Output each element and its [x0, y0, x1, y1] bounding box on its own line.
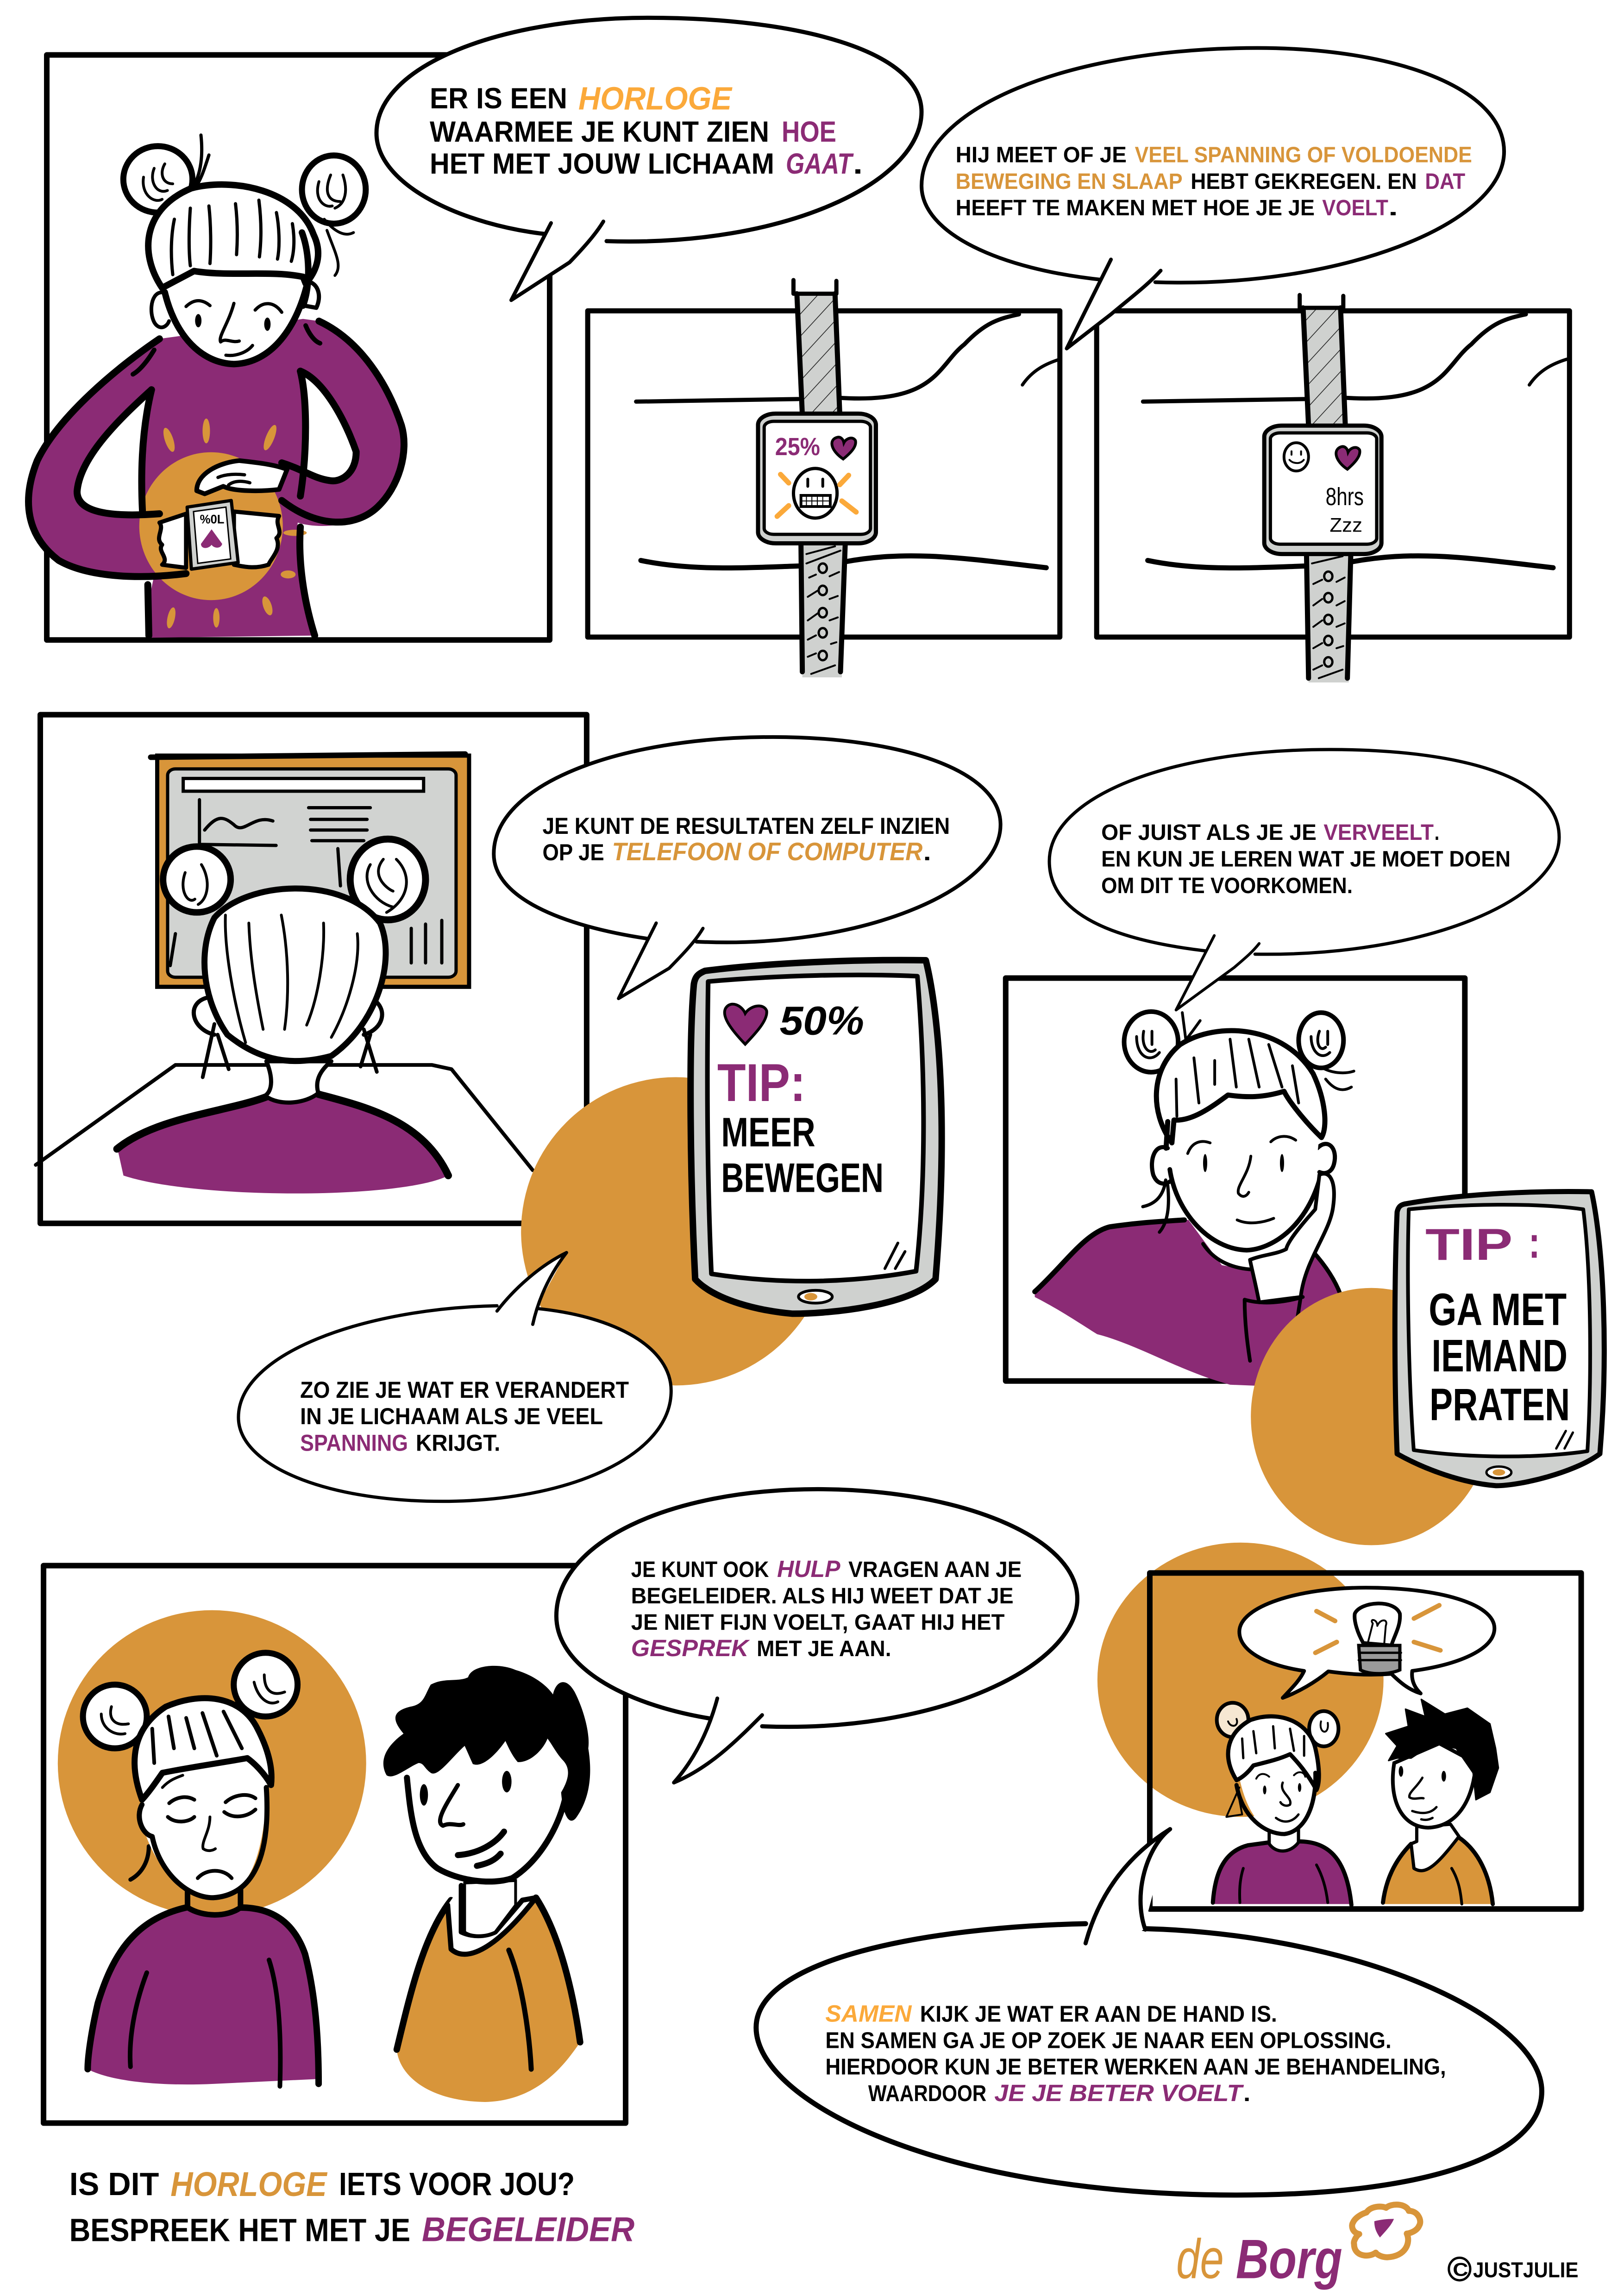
icon: phone with tip meer bewegen: BEWEGEN — [721, 1155, 884, 1201]
closing text: is dit horloge iets voor jou: IETS VOOR JOU? — [339, 2166, 575, 2202]
speech bubble: horloge: . — [853, 147, 863, 180]
speech bubble: samen: WAARDOOR — [868, 2081, 986, 2106]
panel frame — [47, 55, 550, 640]
icon: tablet with tip ga met iemand praten: IEMAND — [1432, 1330, 1568, 1381]
panel frame — [44, 1565, 626, 2123]
speech bubble: meet spanning: VOELT — [1322, 195, 1388, 220]
panel frame — [1097, 311, 1569, 637]
panel frame — [40, 715, 587, 1223]
speech bubble: meet spanning: . — [1388, 195, 1398, 220]
speech bubble: samen: . — [1243, 2081, 1250, 2106]
speech bubble: verandert in lichaam: IN JE LICHAAM ALS JE VEEL — [300, 1403, 603, 1429]
illustration: sad girl — [83, 1653, 319, 2086]
speech bubble: horloge — [376, 18, 922, 300]
speech bubble: resultaten inzien — [494, 737, 1001, 999]
panel: watch with sleep reading — [1097, 295, 1569, 682]
speech bubble: verandert in lichaam: KRIJGT. — [416, 1430, 500, 1456]
closing text: is dit horloge iets voor jou: HORLOGE — [170, 2165, 327, 2203]
speech bubble: samen: KIJK JE WAT ER AAN DE HAND IS. — [920, 2002, 1277, 2027]
speech bubble: hulp vragen: GESPREK — [631, 1635, 750, 1662]
icon: phone with tip meer bewegen — [690, 960, 942, 1314]
icon: tablet with tip ga met iemand praten — [1395, 1192, 1604, 1486]
speech bubble: verandert in lichaam: ZO ZIE JE WAT ER VERANDERT — [300, 1376, 629, 1403]
speech bubble: resultaten inzien: OP JE — [543, 839, 604, 865]
illustration: arm lines — [1143, 314, 1567, 568]
speech bubble: verveelt: VERVEELT — [1323, 820, 1434, 845]
icon: watch face with 25% and stressed smiley — [758, 413, 876, 544]
closing text: is dit horloge iets voor jou — [69, 2165, 634, 2248]
orange circle behind frame — [1097, 1543, 1384, 1817]
icon: tablet with tip ga met iemand praten: TIP — [1425, 1220, 1512, 1270]
speech bubble: hulp vragen: VRAGEN AAN JE — [848, 1557, 1022, 1582]
speech bubble: hulp vragen: BEGELEIDER. ALS HIJ WEET DAT JE — [631, 1583, 1014, 1608]
speech bubble: samen: SAMEN — [825, 2000, 912, 2027]
illustration: girl head — [123, 135, 366, 364]
icon: phone with tip meer bewegen: 50% — [780, 998, 864, 1044]
speech bubble: resultaten inzien: . — [923, 839, 931, 865]
icon: watch face with smiley heart and sleep: 8hrs — [1326, 483, 1364, 511]
speech bubble: horloge: HET MET JOUW LICHAAM — [430, 147, 774, 180]
orange circle behind phone — [521, 1077, 830, 1385]
panel frame — [1006, 978, 1465, 1381]
illustration: smiling boy — [1383, 1699, 1499, 1904]
thought bubble with light bulb — [1239, 1588, 1494, 1698]
speech bubble: horloge: WAARMEE JE KUNT ZIEN — [430, 115, 769, 148]
icon: phone with tip meer bewegen: TIP: — [717, 1053, 806, 1113]
speech bubble: horloge: ER IS EEN — [430, 82, 567, 115]
panel: watch with stress reading — [588, 280, 1060, 677]
icon: watch face with smiley heart and sleep — [1264, 425, 1381, 554]
illustration: girl with watch — [29, 319, 404, 638]
illustration: boy — [383, 1666, 590, 2102]
speech bubble: verveelt: OF JUIST ALS JE JE — [1101, 820, 1317, 845]
panel: girl at computer — [36, 715, 1001, 1501]
panel: thinking girl — [1006, 750, 1604, 1545]
illustration: monitor with charts — [150, 754, 469, 987]
speech bubble: horloge: GAAT — [786, 147, 854, 180]
illustration: watch strap — [1300, 295, 1351, 682]
speech bubble: resultaten inzien: TELEFOON OF COMPUTER — [612, 838, 922, 866]
orange circle behind girl — [58, 1610, 366, 1916]
illustration: thinking girl — [1035, 1012, 1354, 1387]
credit: justjulie — [1449, 2258, 1578, 2282]
illustration: girl with watch: %0L — [200, 513, 224, 526]
icon: tablet with tip ga met iemand praten: : — [1529, 1218, 1540, 1268]
panel: samen with light bulb — [1097, 1543, 1581, 1909]
closing text: is dit horloge iets voor jou: BEGELEIDER — [422, 2210, 634, 2248]
speech bubble: hulp vragen: JE KUNT OOK — [631, 1557, 769, 1582]
illustration: girl from behind — [36, 839, 533, 1194]
panel: sad girl and boy — [44, 1565, 626, 2123]
icon: watch face with smiley heart and sleep: Zzz — [1329, 514, 1362, 536]
credit: justjulie: C — [1453, 2259, 1468, 2280]
speech bubble: meet spanning: DAT — [1425, 169, 1465, 194]
illustration: arm lines — [636, 314, 1060, 568]
speech bubble: horloge: HORLOGE — [578, 81, 733, 117]
speech bubble: hulp vragen: JE NIET FIJN VOELT, GAAT HIJ HET — [631, 1610, 1005, 1635]
speech bubble: meet spanning: HEBT GEKREGEN. EN — [1191, 169, 1417, 194]
orange circle behind tablet — [1251, 1288, 1492, 1545]
speech bubble: verveelt: OM DIT TE VOORKOMEN. — [1101, 873, 1353, 898]
speech bubble: samen: JE JE BETER VOELT — [994, 2079, 1244, 2106]
speech bubble: meet spanning: HIJ MEET OF JE — [956, 142, 1127, 167]
speech bubble: verveelt: . — [1435, 820, 1439, 845]
panel frame — [1150, 1573, 1581, 1909]
speech bubble: samen: HIERDOOR KUN JE BETER WERKEN AAN JE BEHANDELING, — [825, 2055, 1446, 2080]
icon: tablet with tip ga met iemand praten: GA MET — [1429, 1284, 1567, 1335]
credit: justjulie: JUSTJULIE — [1473, 2258, 1578, 2282]
speech bubble: meet spanning: BEWEGING EN SLAAP — [956, 169, 1183, 194]
speech bubble: hulp vragen: MET JE AAN. — [757, 1636, 891, 1661]
logo: de Borg: de — [1176, 2228, 1224, 2290]
speech bubble: verveelt — [1049, 750, 1559, 1010]
speech bubble: meet spanning: HEEFT TE MAKEN MET HOE JE JE — [956, 195, 1315, 220]
icon: watch face with 25% and stressed smiley: 25% — [775, 433, 820, 461]
illustration: watch strap — [793, 280, 845, 677]
speech bubble: hulp vragen: HULP — [777, 1556, 840, 1582]
speech bubble: verveelt: EN KUN JE LEREN WAT JE MOET DOEN — [1101, 847, 1511, 872]
speech bubble: horloge: HOE — [782, 115, 836, 148]
speech bubble: hulp vragen — [556, 1489, 1077, 1783]
icon: phone with tip meer bewegen: MEER — [721, 1109, 815, 1156]
speech bubble: meet spanning — [922, 48, 1504, 349]
speech bubble: samen: EN SAMEN GA JE OP ZOEK JE NAAR EEN OPLOSSING. — [825, 2028, 1392, 2053]
panel: girl looks at watch — [29, 55, 550, 640]
icon: tablet with tip ga met iemand praten: PRATEN — [1430, 1379, 1570, 1430]
illustration: smiling girl — [1213, 1703, 1351, 1905]
speech bubble: samen — [756, 1829, 1542, 2195]
logo: de Borg — [1176, 2205, 1420, 2290]
panel frame — [588, 311, 1060, 637]
closing text: is dit horloge iets voor jou: IS DIT — [69, 2166, 159, 2202]
speech bubble: verandert in lichaam: SPANNING — [300, 1430, 408, 1456]
speech bubble: verandert in lichaam — [238, 1252, 671, 1501]
speech bubble: resultaten inzien: JE KUNT DE RESULTATEN ZELF INZIEN — [543, 813, 950, 839]
logo: de Borg: Borg — [1236, 2228, 1342, 2290]
closing text: is dit horloge iets voor jou: BESPREEK HET MET JE — [69, 2212, 410, 2248]
